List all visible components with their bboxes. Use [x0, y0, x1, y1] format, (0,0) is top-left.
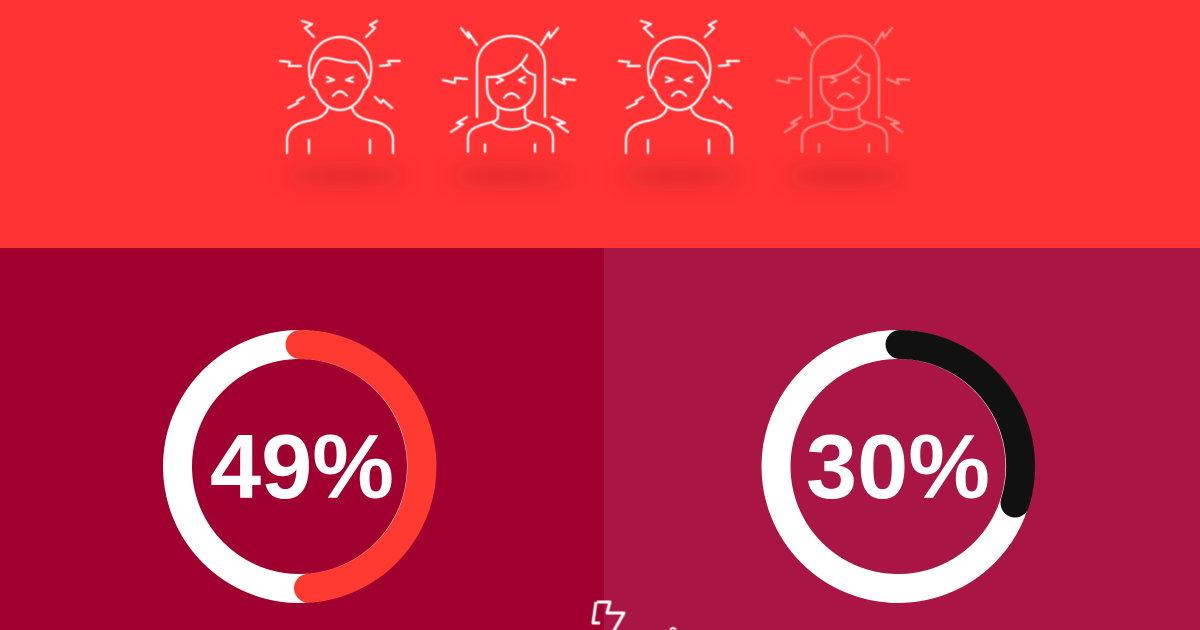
panel: left statistic background: [0, 248, 604, 630]
panel: top red banner: [0, 0, 1200, 248]
panel: right statistic background: [604, 248, 1200, 630]
stat: 49%: 49%: [210, 417, 394, 518]
icon: stressed man 2: [619, 21, 740, 182]
chart: 49% donut: [178, 344, 422, 588]
chart: 30% donut: [776, 344, 1021, 588]
icon: stressed man 1: [280, 21, 405, 182]
icon: lightning bolt logo: [593, 602, 676, 630]
icon: stressed woman 2 (faded): [777, 28, 909, 182]
stat: 30%: 30%: [806, 417, 990, 518]
icon: stressed woman 1: [443, 28, 575, 182]
